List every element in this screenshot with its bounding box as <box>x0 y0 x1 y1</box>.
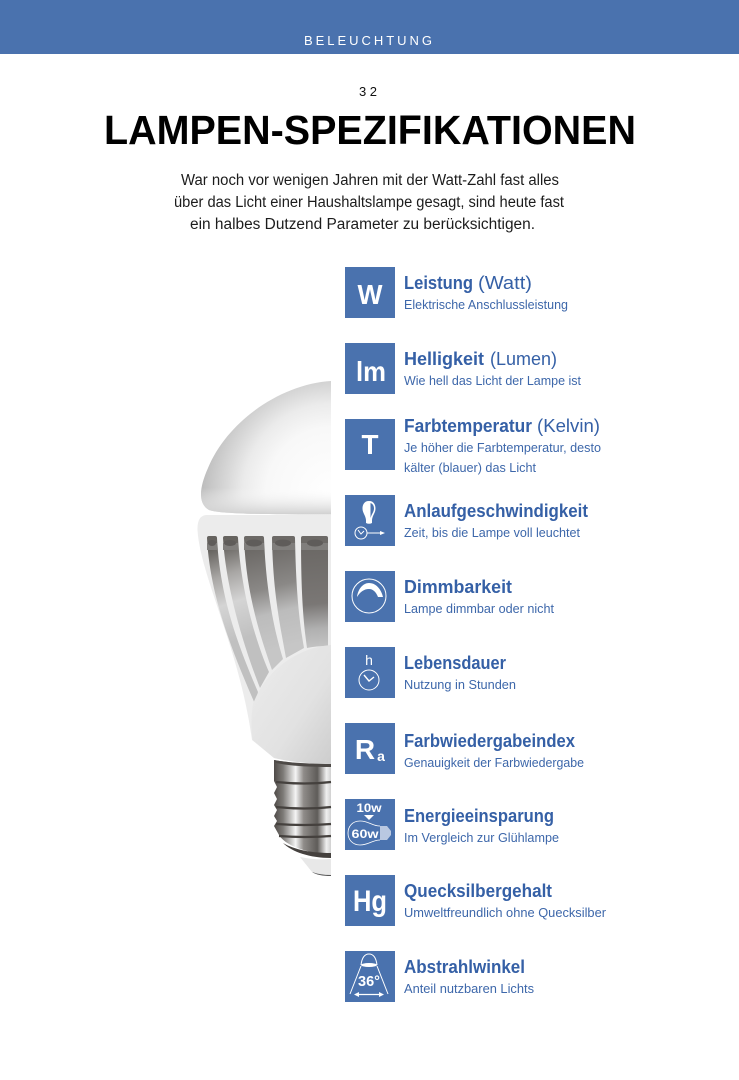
icon: T <box>345 419 395 470</box>
spec: Farbtemperatur: (Kelvin) <box>537 416 600 436</box>
illustration: half LED bulb <box>197 381 331 876</box>
spec: Leistung: Leistung <box>404 273 473 293</box>
icon: Hg <box>345 875 395 926</box>
title: LAMPEN-SPEZIFIKATIONEN <box>104 107 636 153</box>
cooling fins <box>207 536 328 704</box>
spec: Energieeinsparung <box>345 799 559 850</box>
spec: Helligkeit <box>345 343 582 394</box>
spec: Abstrahlwinkel: Abstrahlwinkel <box>404 957 525 977</box>
icon: beam angle <box>345 951 395 1002</box>
spec: Energieeinsparung: Energieeinsparung <box>404 806 554 826</box>
icon: Ra: a <box>377 748 385 764</box>
icon: hours clock <box>345 647 395 698</box>
intro paragraph: War noch vor wenigen Jahren mit der Watt-Zahl fast alles <box>181 172 559 189</box>
spec: Farbwiedergabeindex <box>345 723 584 774</box>
spec: Leistung: (Watt) <box>478 273 532 293</box>
spec: Dimmbarkeit: Lampe dimmbar oder nicht <box>404 602 555 616</box>
spec: Anlaufgeschwindigkeit <box>345 495 588 546</box>
spec: Farbtemperatur: Farbtemperatur <box>404 416 532 436</box>
intro paragraph: über das Licht einer Haushaltslampe gesagt, sind heute fast <box>174 194 565 211</box>
icon: T: T <box>362 429 378 460</box>
spec: Leistung: Elektrische Anschlussleistung <box>404 298 568 312</box>
icon: hours clock: h <box>365 652 373 668</box>
spec: Leistung <box>345 267 568 318</box>
spec: Anlaufgeschwindigkeit: Anlaufgeschwindigkeit <box>404 501 588 521</box>
icon: bulb with clock <box>345 495 395 546</box>
spec: Farbtemperatur <box>345 416 601 475</box>
icon: Ra: R <box>355 734 375 765</box>
spec: Lebensdauer <box>345 647 516 698</box>
spec: Quecksilbergehalt: Quecksilbergehalt <box>404 881 552 901</box>
spec: Lebensdauer: Nutzung in Stunden <box>404 678 516 692</box>
spec: Helligkeit: Helligkeit <box>404 349 484 369</box>
spec: Anlaufgeschwindigkeit: Zeit, bis die Lampe voll leuchtet <box>404 526 581 540</box>
icon: 10w versus 60w bulb <box>345 799 395 850</box>
icon: beam angle: 36° <box>358 974 380 990</box>
page number: 32 <box>359 84 377 99</box>
spec: Farbtemperatur: kälter (blauer) das Licht <box>404 461 537 475</box>
icon: W <box>345 267 395 318</box>
header label: BELEUCHTUNG <box>304 33 432 48</box>
icon: 10w versus 60w bulb: 10w <box>356 801 382 815</box>
spec: Dimmbarkeit <box>345 571 555 622</box>
icon: lm: lm <box>356 356 386 387</box>
heat sink collar <box>197 515 331 766</box>
intro paragraph: ein halbes Dutzend Parameter zu berücksichtigen. <box>190 216 535 233</box>
spec: Dimmbarkeit: Dimmbarkeit <box>404 577 512 597</box>
intro paragraph <box>174 172 565 233</box>
icon: 10w versus 60w bulb: 60w <box>352 827 379 841</box>
spec: Energieeinsparung: Im Vergleich zur Glühlampe <box>404 831 559 845</box>
spec: Abstrahlwinkel <box>345 951 534 1002</box>
header bar <box>0 0 739 54</box>
icon: Hg: Hg <box>353 885 387 918</box>
spec: Quecksilbergehalt: Umweltfreundlich ohne Quecksilber <box>404 906 606 920</box>
spec: Lebensdauer: Lebensdauer <box>404 653 506 673</box>
icon: lm <box>345 343 395 394</box>
spec: Farbtemperatur: Je höher die Farbtemperatur, desto <box>404 441 601 455</box>
spec: Abstrahlwinkel: Anteil nutzbaren Lichts <box>404 982 534 996</box>
icon: W: W <box>358 279 383 310</box>
icon: dimmer dial <box>345 571 395 622</box>
spec: Farbwiedergabeindex: Genauigkeit der Farbwiedergabe <box>404 756 584 770</box>
icon: Ra <box>345 723 395 774</box>
spec: Helligkeit: Wie hell das Licht der Lampe ist <box>404 374 582 388</box>
spec: Quecksilbergehalt <box>345 875 606 926</box>
spec: Farbwiedergabeindex: Farbwiedergabeindex <box>404 731 575 751</box>
lower housing <box>251 645 331 764</box>
bulb dome <box>201 381 331 515</box>
screw base <box>274 760 331 876</box>
spec: Helligkeit: (Lumen) <box>490 349 557 369</box>
